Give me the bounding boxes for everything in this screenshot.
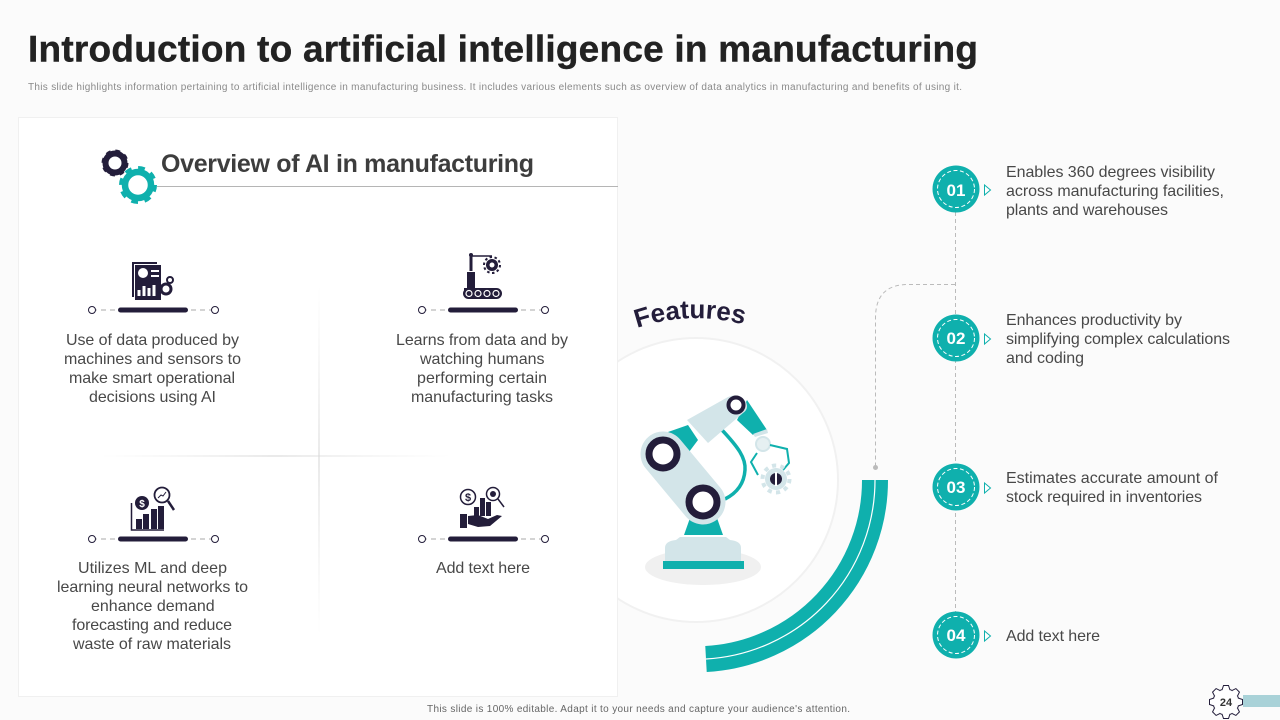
block: add text bbox=[418, 488, 548, 577]
icon: growth chart with magnifier bbox=[132, 488, 174, 530]
description: Use of data produced by bbox=[66, 332, 239, 349]
panel heading: Overview of AI in manufacturing bbox=[161, 150, 534, 178]
text: Enhances productivity by bbox=[1006, 312, 1182, 329]
feature 04 bbox=[932, 612, 1100, 658]
text: across manufacturing facilities, bbox=[1006, 183, 1224, 200]
arrow bbox=[984, 334, 990, 344]
arrow bbox=[984, 631, 990, 641]
text bbox=[1006, 470, 1219, 506]
features illustration circle bbox=[554, 338, 838, 622]
dashed connectors bbox=[873, 212, 956, 612]
badge bbox=[932, 314, 980, 362]
badge bbox=[932, 464, 980, 510]
description bbox=[57, 560, 248, 653]
teal arc bbox=[706, 480, 875, 659]
text: Add text here bbox=[1006, 628, 1100, 645]
connector bar bbox=[88, 536, 218, 542]
block: learns from data bbox=[396, 253, 568, 406]
badge: 02 bbox=[947, 329, 965, 348]
footer note: This slide is 100% editable. Adapt it to your needs and capture your audience's attention. bbox=[427, 704, 850, 715]
text: and coding bbox=[1006, 350, 1084, 367]
illustration: robot arm bbox=[645, 395, 790, 585]
badge: 01 bbox=[947, 181, 965, 200]
feature 01 bbox=[932, 164, 1224, 219]
badge: 04 bbox=[947, 626, 966, 645]
description: Learns from data and by bbox=[396, 332, 568, 349]
text: simplifying complex calculations bbox=[1006, 331, 1230, 348]
text bbox=[1006, 312, 1230, 367]
description: make smart operational bbox=[69, 370, 235, 387]
description: manufacturing tasks bbox=[411, 389, 553, 406]
text bbox=[1006, 164, 1224, 219]
panel: overview of AI in manufacturing bbox=[18, 118, 618, 696]
description: waste of raw materials bbox=[72, 636, 231, 653]
text: plants and warehouses bbox=[1006, 202, 1168, 219]
badge: 03 bbox=[947, 478, 965, 497]
description: learning neural networks to bbox=[57, 579, 248, 596]
icon: gears bbox=[103, 151, 155, 202]
features heading: Features bbox=[634, 302, 745, 328]
text: Enables 360 degrees visibility bbox=[1006, 164, 1215, 181]
block: ML and deep learning bbox=[57, 488, 248, 653]
badge bbox=[932, 612, 980, 658]
arrow bbox=[984, 185, 990, 195]
connector bar bbox=[418, 536, 548, 542]
feature 03 bbox=[932, 464, 1219, 510]
badge bbox=[932, 166, 980, 212]
description: watching humans bbox=[419, 351, 545, 368]
description: decisions using AI bbox=[89, 389, 216, 406]
connector bar bbox=[88, 306, 218, 314]
text: stock required in inventories bbox=[1006, 489, 1202, 506]
title: Introduction to artificial intelligence in manufacturing bbox=[28, 28, 978, 70]
icon: report with gears bbox=[132, 262, 173, 300]
page number bbox=[1210, 686, 1280, 718]
description: Add text here bbox=[436, 560, 530, 577]
arrow bbox=[984, 483, 990, 493]
icon: hand holding chart: $ bbox=[465, 492, 471, 504]
description bbox=[396, 332, 568, 406]
description: forecasting and reduce bbox=[72, 617, 232, 634]
description bbox=[64, 332, 241, 406]
description: Utilizes ML and deep bbox=[78, 560, 227, 577]
description: enhance demand bbox=[91, 598, 215, 615]
description: machines and sensors to bbox=[64, 351, 241, 368]
block: data produced by machines bbox=[64, 262, 241, 406]
icon: growth chart with magnifier: $ bbox=[139, 499, 145, 510]
page number: 24 bbox=[1220, 697, 1233, 709]
text: Estimates accurate amount of bbox=[1006, 470, 1219, 487]
connector bar bbox=[418, 306, 548, 314]
icon: robot arm on conveyor bbox=[463, 253, 502, 299]
features heading bbox=[634, 302, 745, 328]
subtitle: This slide highlights information pertaining to artificial intelligence in manufacturing business. It includes various elements such as overview of data analytics in manufacturing and benefits of using it. bbox=[28, 82, 962, 93]
description: performing certain bbox=[417, 370, 547, 387]
feature 02 bbox=[932, 312, 1230, 367]
